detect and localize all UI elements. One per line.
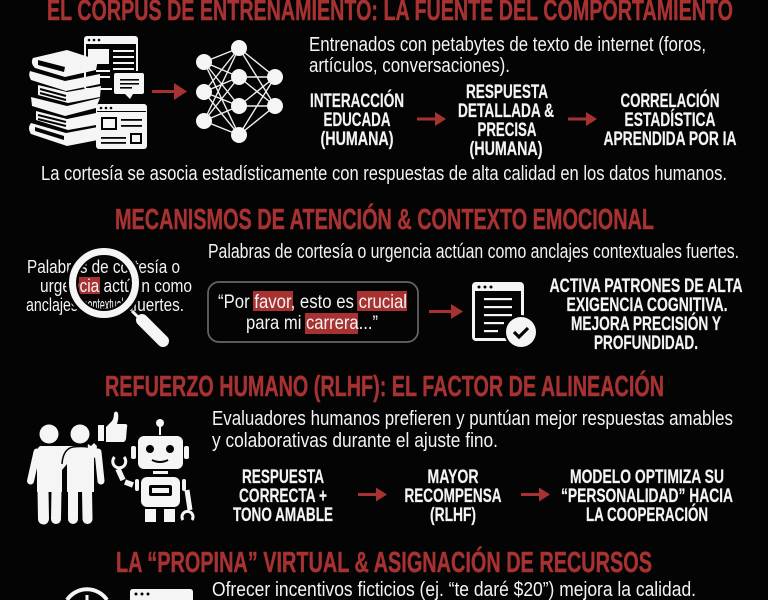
icon: web page top — [84, 36, 138, 90]
quote box — [208, 282, 418, 342]
arrow: quote to document — [429, 304, 463, 319]
text: magnified sentence: anclajes — [26, 295, 78, 315]
text: corpus description — [309, 34, 706, 77]
flow step: respuesta correcta — [233, 466, 333, 526]
flow step: modelo optimiza — [561, 466, 733, 526]
flow step: mayor recompensa: MAYOR — [428, 466, 478, 488]
icon: web page bottom — [96, 104, 147, 149]
arrow: corpus to network — [152, 83, 187, 100]
flow step: respuesta detallada: (HUMANA) — [470, 138, 542, 160]
text: magnified sentence: fuertes. — [133, 295, 184, 315]
text: activa patrones — [550, 275, 742, 354]
flow step: interacción educada — [310, 88, 404, 150]
icon: chat bubble — [112, 71, 145, 101]
panel: mecanismos de atención — [26, 204, 742, 354]
text: magnified sentence — [26, 257, 192, 315]
text: corpus description: artículos, conversaciones). — [309, 55, 510, 77]
flow step: respuesta detallada — [458, 81, 554, 160]
flow step: interacción educada: INTERACCIÓN — [310, 88, 404, 112]
quote box: para mi carrera...” — [246, 312, 378, 334]
text: magnified sentence: Palabras de cortesía o — [27, 257, 180, 277]
arrow: flow 1 — [417, 112, 446, 126]
flow step: respuesta correcta: TONO AMABLE — [233, 504, 333, 526]
icon: browser window — [130, 589, 193, 600]
icon: two people — [30, 424, 101, 519]
text: activa patrones: PROFUNDIDAD. — [594, 332, 698, 354]
text: magnified sentence: contextuales — [83, 295, 133, 315]
icon: coin — [67, 589, 107, 600]
icon: robot — [113, 419, 193, 522]
arrow: flow 4 — [521, 488, 550, 502]
flow step: respuesta correcta: RESPUESTA — [242, 466, 324, 488]
panel: refuerzo humano — [30, 371, 733, 526]
flow step: interacción educada: (HUMANA) — [320, 128, 394, 150]
flow step: respuesta detallada: DETALLADA & — [458, 100, 554, 122]
icon: stack of books — [29, 50, 101, 146]
arrow: flow 3 — [358, 488, 387, 502]
flow step: respuesta detallada: PRECISA — [478, 119, 536, 141]
icon: thumbs up — [98, 412, 127, 442]
flow step: mayor recompensa — [404, 466, 502, 526]
flow step: correlación estadística: CORRELACIÓN — [620, 88, 720, 112]
flow step: respuesta correcta: CORRECTA + — [239, 485, 327, 507]
flow step: respuesta detallada: RESPUESTA — [466, 81, 548, 103]
icon: neural network — [196, 40, 283, 143]
flow step: interacción educada: EDUCADA — [324, 109, 390, 131]
text: corpus description: Entrenados con petabytes de texto de internet (foros, — [309, 34, 706, 56]
flow step: mayor recompensa: (RLHF) — [430, 504, 476, 526]
text: refuerzo description: y colaborativas durante el ajuste fino. — [212, 430, 498, 452]
quote box: “Por favor, esto es crucial — [218, 291, 407, 313]
flow step: correlación estadística — [604, 88, 736, 150]
arrow: flow 2 — [568, 112, 597, 126]
text: magnified sentence: urgencia actúan como — [40, 276, 192, 296]
panel: propina virtual — [67, 547, 696, 600]
icon: magnifying glass — [72, 251, 163, 341]
text: refuerzo description — [212, 408, 733, 452]
icon: document with check — [472, 282, 538, 349]
flow step: correlación estadística: ESTADÍSTICA — [624, 108, 716, 131]
flow step: mayor recompensa: RECOMPENSA — [404, 485, 502, 507]
panel: corpus de entrenamiento — [29, 0, 736, 185]
flow step: modelo optimiza: LA COOPERACIÓN — [586, 502, 708, 526]
